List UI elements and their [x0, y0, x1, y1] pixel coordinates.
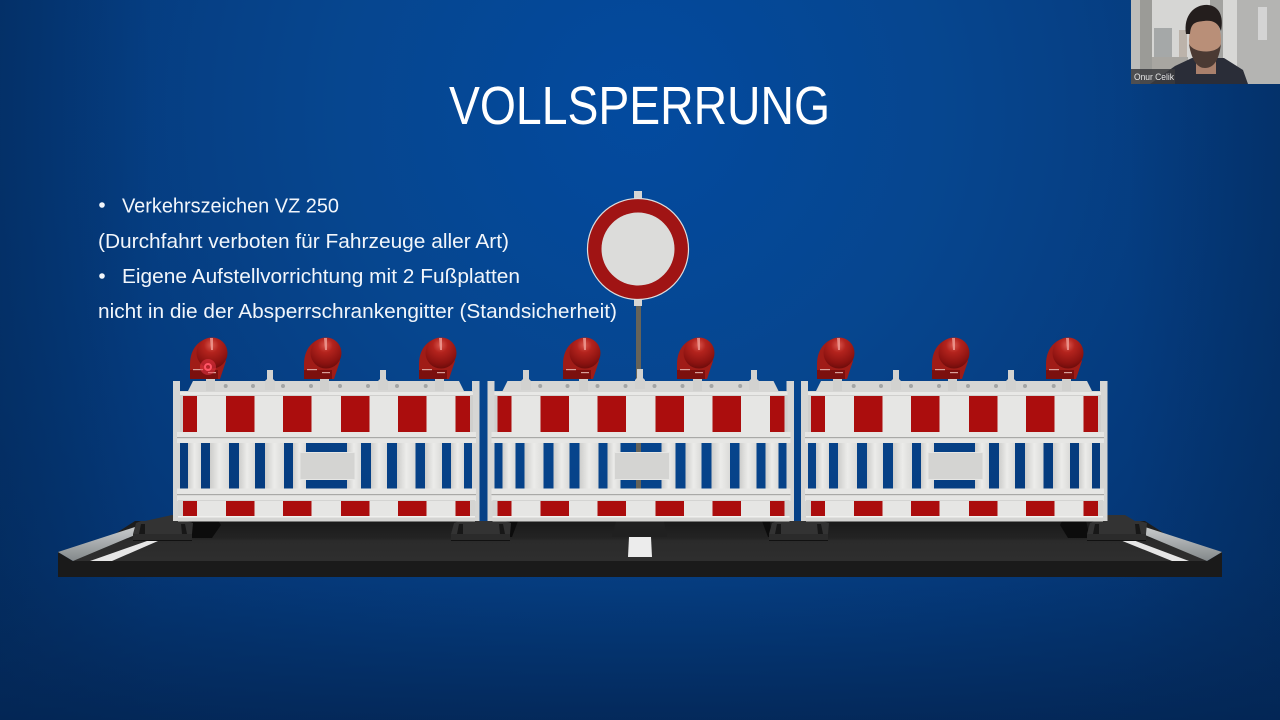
left lane line — [90, 541, 158, 561]
lamp 3 — [419, 338, 456, 391]
line 4: nicht in die der Absperrschrankengitter (Standsicherheit) — [98, 301, 617, 323]
line 2: (Durchfahrt verboten für Fahrzeuge aller Art) — [98, 231, 509, 253]
shadow right — [1060, 516, 1090, 538]
warning lamps — [190, 338, 1084, 391]
lamp 7 — [932, 338, 970, 391]
foot far right — [1087, 515, 1147, 541]
sign pole — [636, 304, 641, 490]
right curb — [1145, 527, 1222, 561]
shadow 1-2 — [508, 521, 518, 537]
bullet 1 — [99, 202, 105, 208]
lamp 6 — [817, 338, 854, 391]
barrier centre — [488, 369, 794, 522]
shadow left — [190, 516, 221, 538]
red ring — [588, 198, 688, 300]
white centre — [602, 212, 674, 286]
clamps — [265, 370, 388, 390]
foot 2-3 — [769, 521, 829, 541]
clamps — [521, 369, 759, 390]
name tag: Onur Celik — [1134, 72, 1174, 82]
traffic sign VZ 250 — [588, 191, 688, 490]
road front edge — [58, 552, 1222, 577]
lamp 2 — [304, 338, 342, 391]
foot far left — [133, 515, 197, 541]
barrier left — [173, 370, 480, 522]
top clamp — [634, 191, 642, 199]
webcam thumbnail — [1131, 0, 1280, 84]
lamp 1 — [190, 338, 228, 391]
barrier right — [801, 370, 1108, 522]
road — [58, 521, 1222, 577]
name tag — [1131, 69, 1175, 84]
foot 1-2 — [451, 521, 511, 541]
lamp 4 — [563, 338, 600, 391]
clamps — [891, 370, 1016, 390]
title: VOLLSPERRUNG — [449, 76, 830, 136]
left curb — [58, 527, 135, 561]
shadow 2-3 — [762, 521, 772, 537]
line 3: Eigene Aufstellvorrichtung mit 2 Fußplatten — [122, 266, 520, 288]
text block: requirements — [98, 196, 617, 323]
centre lane mark — [628, 537, 652, 557]
lamp 8 — [1046, 338, 1084, 391]
bullet 2 — [99, 273, 105, 279]
bottom clamp — [634, 297, 642, 306]
road surface — [73, 521, 1207, 561]
centre foot — [612, 521, 667, 537]
right lane line — [1120, 540, 1189, 561]
line 1: Verkehrszeichen VZ 250 — [122, 196, 339, 218]
pointer highlight — [200, 359, 216, 375]
base plates — [133, 515, 1147, 541]
lamp 5 — [677, 338, 714, 391]
